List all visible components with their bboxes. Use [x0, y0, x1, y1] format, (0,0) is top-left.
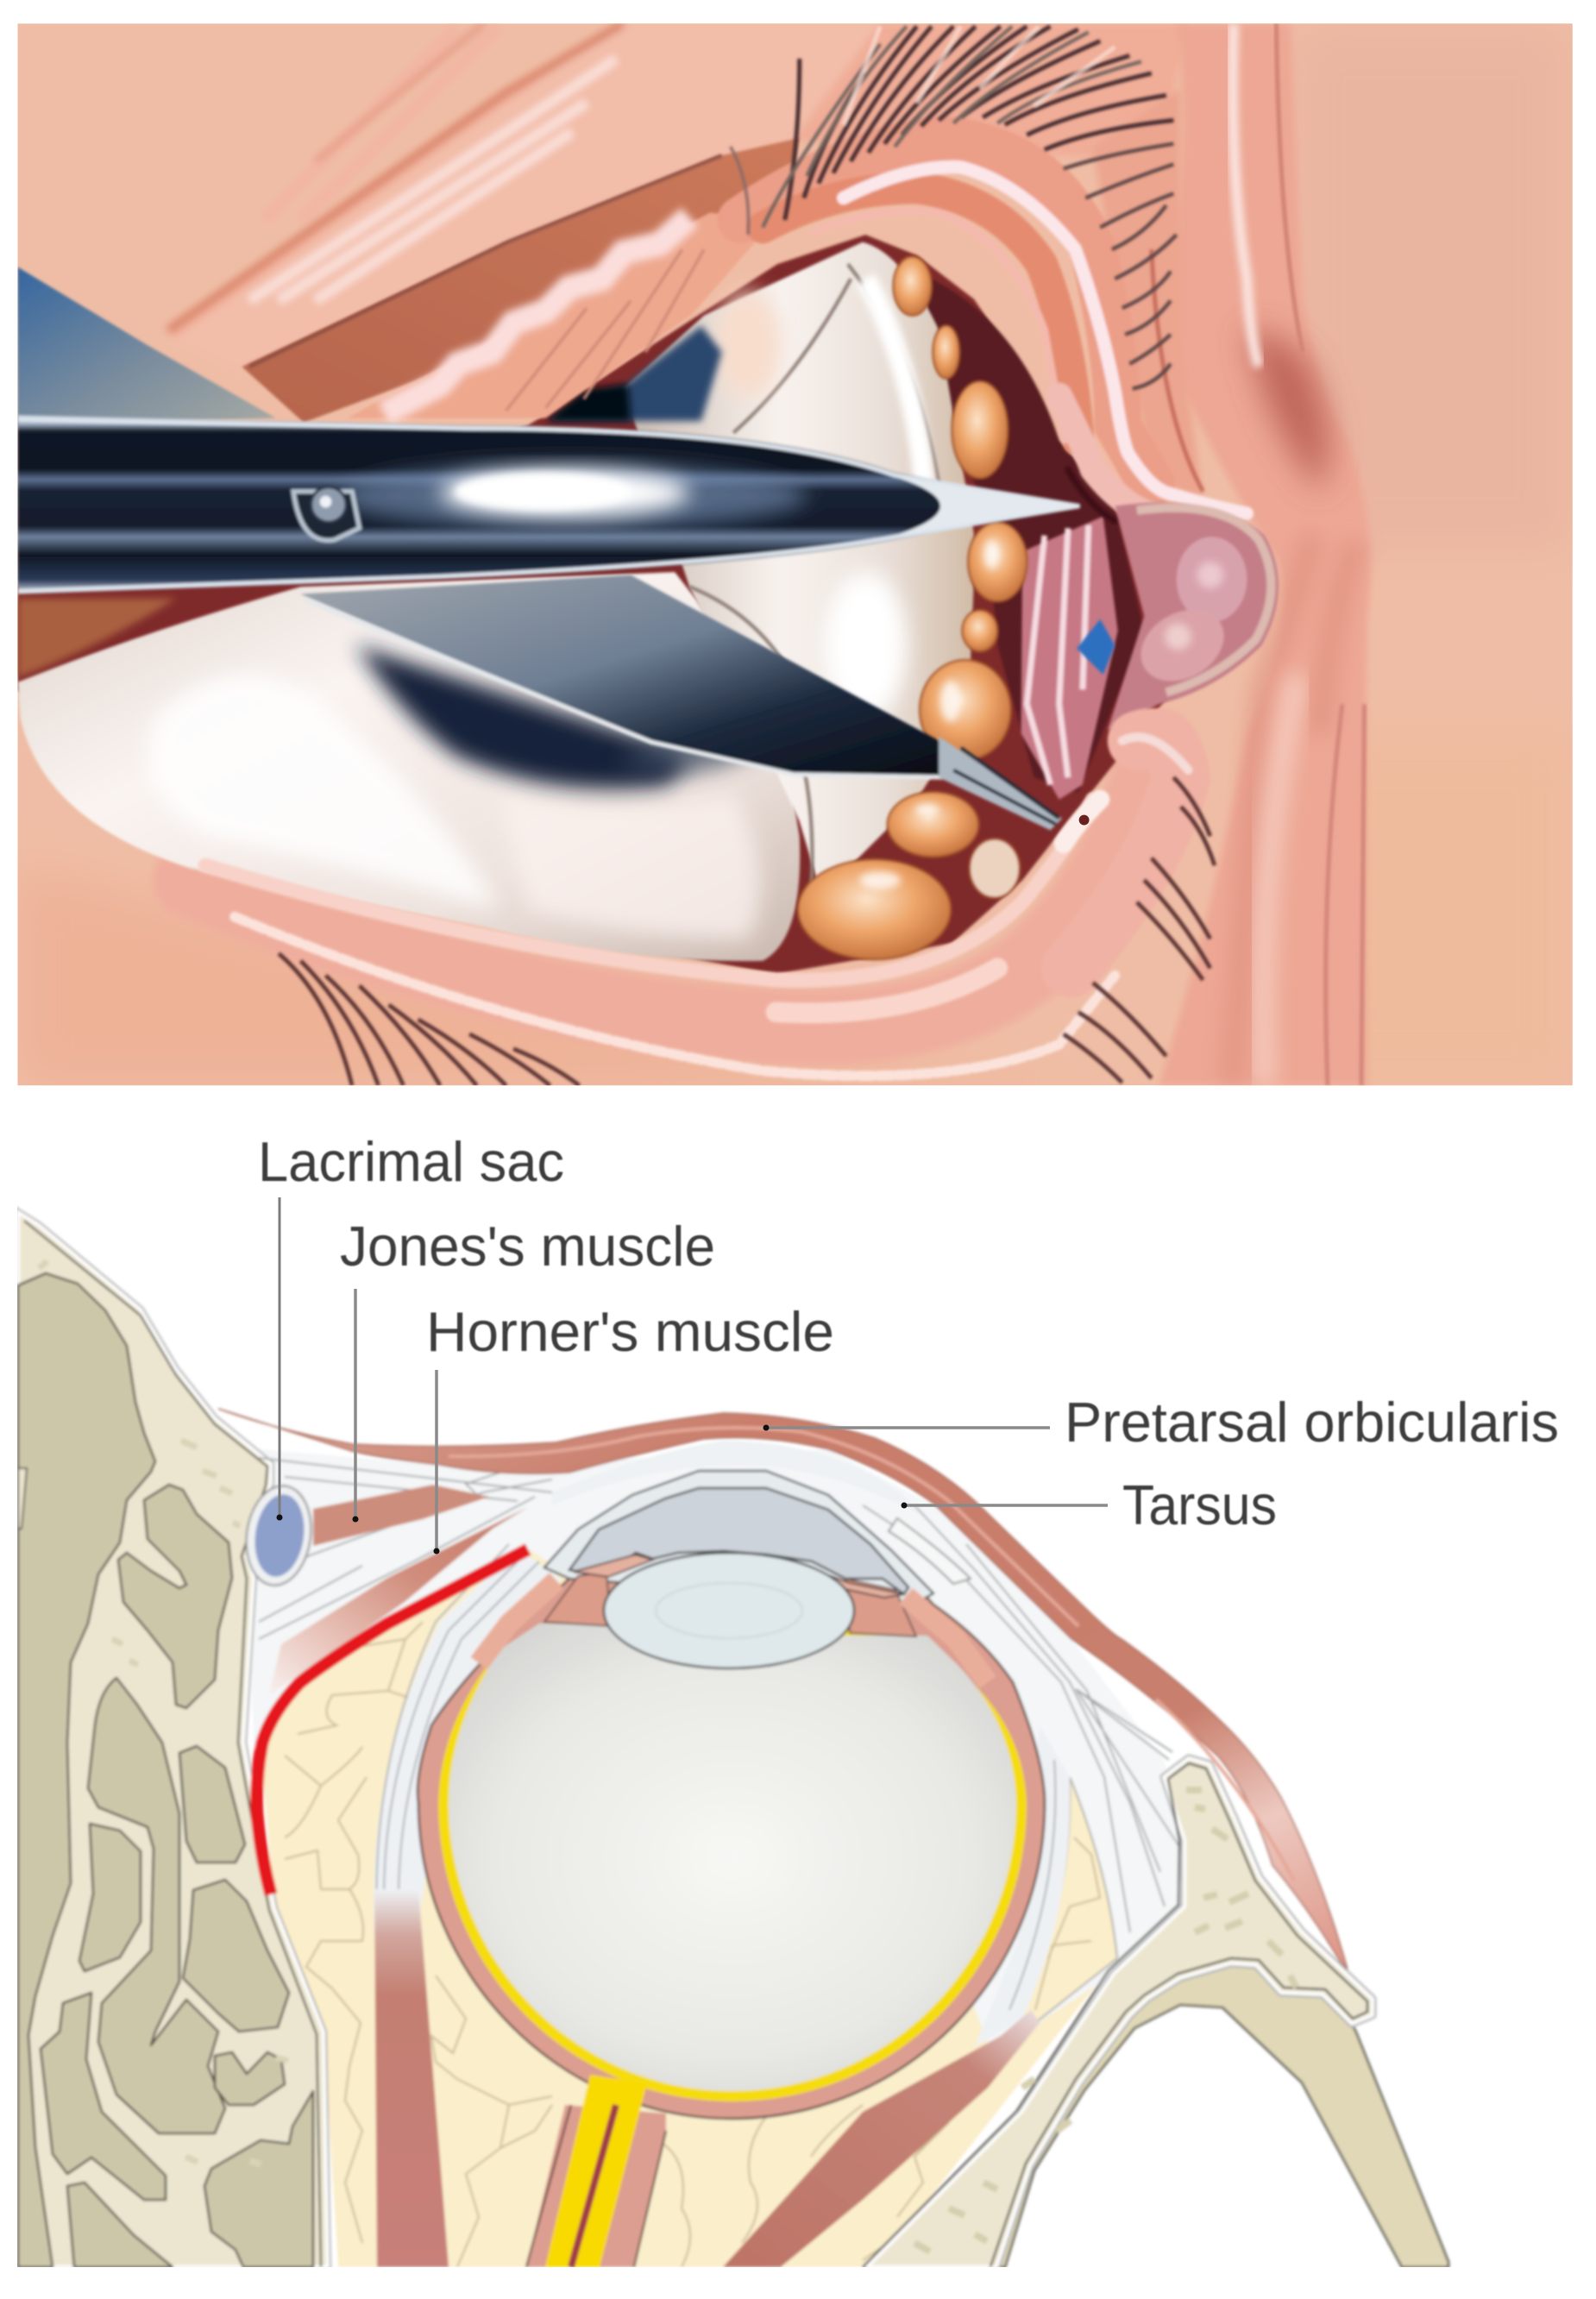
orbital fat globules: [798, 257, 1027, 959]
lateral rectus muscle: [723, 2010, 1040, 2267]
lower punctum: [1079, 815, 1090, 825]
red incision line: [257, 1549, 528, 1894]
nasal fold: [1159, 23, 1371, 1085]
Horner's muscle: [269, 1507, 528, 1695]
caruncle: [1108, 502, 1279, 731]
lower lashes: [279, 777, 1215, 1085]
right orbital bone, rim: [867, 1758, 1373, 2267]
anterior segment outer arc: [544, 1471, 933, 1605]
lower lid margin: [205, 737, 1188, 1076]
right bone porosity speckle: [914, 1790, 1297, 2252]
left bone casing: [18, 1212, 328, 2267]
label: Pretarsal orbicularis: Pretarsal orbicularis: [1065, 1391, 1559, 1454]
sclera limbus bands: [479, 1580, 988, 1682]
brown muscle band of upper lid: [242, 138, 800, 423]
dark blue shadow on globe: [356, 645, 689, 788]
panel: surgical illustration of the eye: [17, 23, 1573, 1085]
label: Horner's muscle: Horner's muscle: [426, 1300, 834, 1363]
pink medial tissue strip: [1021, 517, 1118, 800]
upper lashes: [731, 27, 1177, 389]
right orbital bone, dark lower lamina: [996, 1963, 1448, 2267]
blue marker triangle: [1077, 619, 1115, 675]
upper globe conjunctiva: [624, 242, 976, 895]
lacrimal sac: [240, 1481, 317, 1590]
lateral Tenon's ring: [975, 1725, 1070, 2046]
iris leaflets: [574, 1555, 904, 1598]
tarsus plate: [889, 1518, 971, 1584]
bone stub at left edge: [18, 1468, 27, 1529]
medial Tenon's ring: [374, 1548, 561, 1932]
vitreous: [449, 1624, 1016, 2091]
upper lid margin: [741, 140, 1247, 521]
ciliary body left: [544, 1572, 611, 1626]
medial rectus muscle: [374, 1889, 449, 2267]
skin shading: [17, 23, 1573, 1085]
globe fold lines: [689, 264, 939, 909]
eyeball sclera: [418, 1567, 1045, 2119]
dark tissue at left edge: [17, 599, 176, 678]
navy patch on upper globe: [546, 325, 722, 421]
striated upper orbicularis skin: [164, 23, 1187, 336]
label: Pretarsal orbicularis: [763, 1391, 1559, 1454]
label: Lacrimal sac: Lacrimal sac: [258, 1130, 564, 1193]
panel: anatomical cross-section diagram: [18, 1212, 1448, 2267]
fat highlights: [859, 540, 999, 889]
lower lid skin band: [191, 748, 1159, 1027]
retina ring: [438, 1626, 1027, 2101]
white band beneath orbicularis: [552, 1441, 919, 1514]
eye cavity: [17, 235, 1173, 974]
orbicularis muscle: [218, 1409, 1348, 1969]
dark medial cavity: [927, 279, 1142, 793]
label: Lacrimal sac: [258, 1130, 564, 1520]
group: sectioned structures: [18, 1212, 1448, 2267]
white highlights on globe: [149, 675, 499, 909]
upper retractor blade: [17, 267, 276, 425]
skin between lashes and fold: [1093, 88, 1203, 499]
Jones's muscle: [313, 1485, 489, 1546]
ciliary body right: [845, 1579, 916, 1636]
orbital fat: [259, 1544, 1117, 2267]
label: Horner's muscle: [426, 1300, 834, 1555]
white tendons and orbital septum: [247, 1449, 1184, 2053]
skin background: [17, 23, 1573, 1085]
label: Tarsus: [901, 1473, 1277, 1536]
frilled lid conjunctiva: [348, 213, 775, 418]
bone porosity speckle: [39, 1261, 288, 2164]
crystalline lens: [604, 1553, 854, 1668]
fat pad right of globe: [1018, 1777, 1117, 2023]
anterior chamber: [569, 1488, 908, 1594]
tendon fibre lines: [259, 1449, 1180, 1932]
fat septation lines: [285, 1622, 1100, 2267]
upper scissor blade: [17, 415, 1079, 594]
optic nerve sheath: [526, 2105, 666, 2267]
label: Tarsus: Tarsus: [1122, 1473, 1277, 1536]
ethmoid and maxillary air cells: [18, 1273, 313, 2267]
optic nerve: [545, 2075, 647, 2267]
label: Jones's muscle: Jones's muscle: [340, 1215, 715, 1278]
label: Jones's muscle: [340, 1215, 715, 1522]
lower globe conjunctiva: [17, 572, 800, 961]
lower scissor blade: [301, 575, 1062, 830]
